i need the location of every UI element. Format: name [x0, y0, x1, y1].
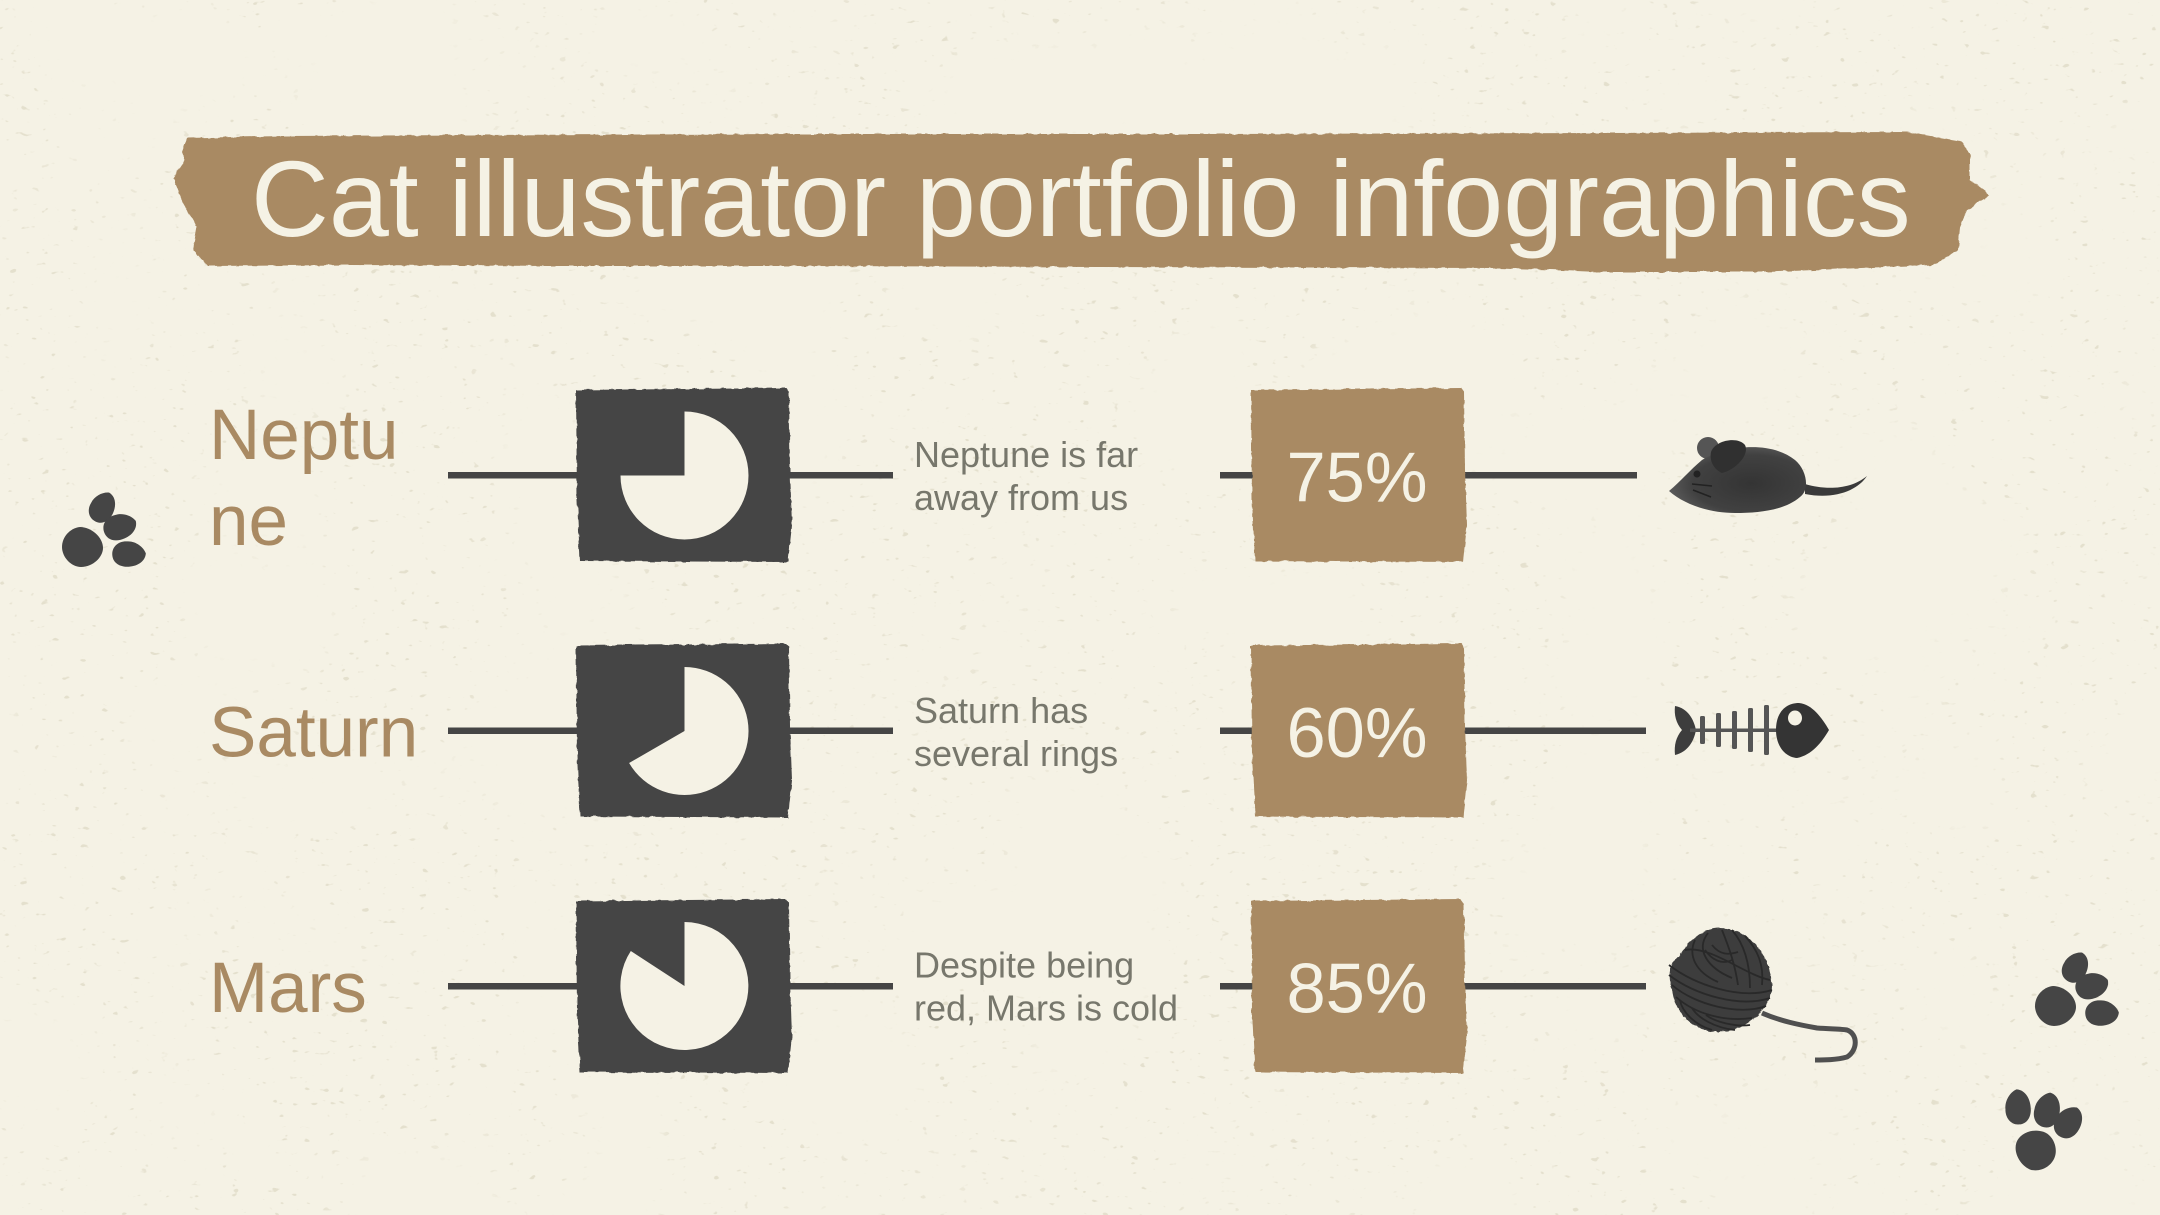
- row: Mars: [209, 899, 1855, 1073]
- title banner: [173, 132, 1990, 272]
- dark box: [576, 899, 792, 1073]
- label: Neptune: ne: [209, 482, 288, 561]
- label: Mars: Mars: [209, 949, 367, 1028]
- dark box: [576, 388, 792, 562]
- connector left: [448, 983, 893, 990]
- percent: 60%: [1286, 693, 1428, 772]
- icon: paw print right upper: [2035, 947, 2119, 1026]
- row: Saturn: [209, 644, 1829, 818]
- description: Neptune is far: [914, 434, 1138, 475]
- description: several rings: [914, 733, 1118, 774]
- pie chart 75%: [620, 412, 748, 540]
- description: away from us: [914, 477, 1128, 518]
- row: Neptune: [209, 388, 1867, 562]
- description: Despite being: [914, 944, 1134, 986]
- percent: 85%: [1286, 948, 1428, 1028]
- connector left: [448, 728, 893, 734]
- icon: paw print left: [62, 487, 146, 567]
- icon: mouse: [1669, 437, 1867, 513]
- tan box: [1251, 899, 1467, 1073]
- label: Saturn: Saturn: [209, 694, 418, 772]
- pie chart 60%: [629, 667, 749, 795]
- icon: yarn ball: [1669, 928, 1855, 1060]
- title: Cat illustrator portfolio infographics: [251, 138, 1911, 259]
- label: Neptune: Neptu: [209, 396, 398, 475]
- pie chart 85%: [620, 922, 748, 1050]
- dark box: [576, 644, 792, 818]
- icon: fish skeleton: [1675, 703, 1829, 758]
- connector right: [1220, 983, 1646, 990]
- percent: 75%: [1286, 438, 1428, 516]
- description: Saturn has: [914, 690, 1088, 731]
- connector right: [1220, 472, 1637, 478]
- connector right: [1220, 728, 1646, 734]
- tan box: [1251, 644, 1467, 818]
- icon: paw print right lower: [2004, 1088, 2088, 1176]
- tan box: [1251, 388, 1467, 562]
- connector left: [448, 472, 893, 478]
- description: red, Mars is cold: [914, 988, 1178, 1028]
